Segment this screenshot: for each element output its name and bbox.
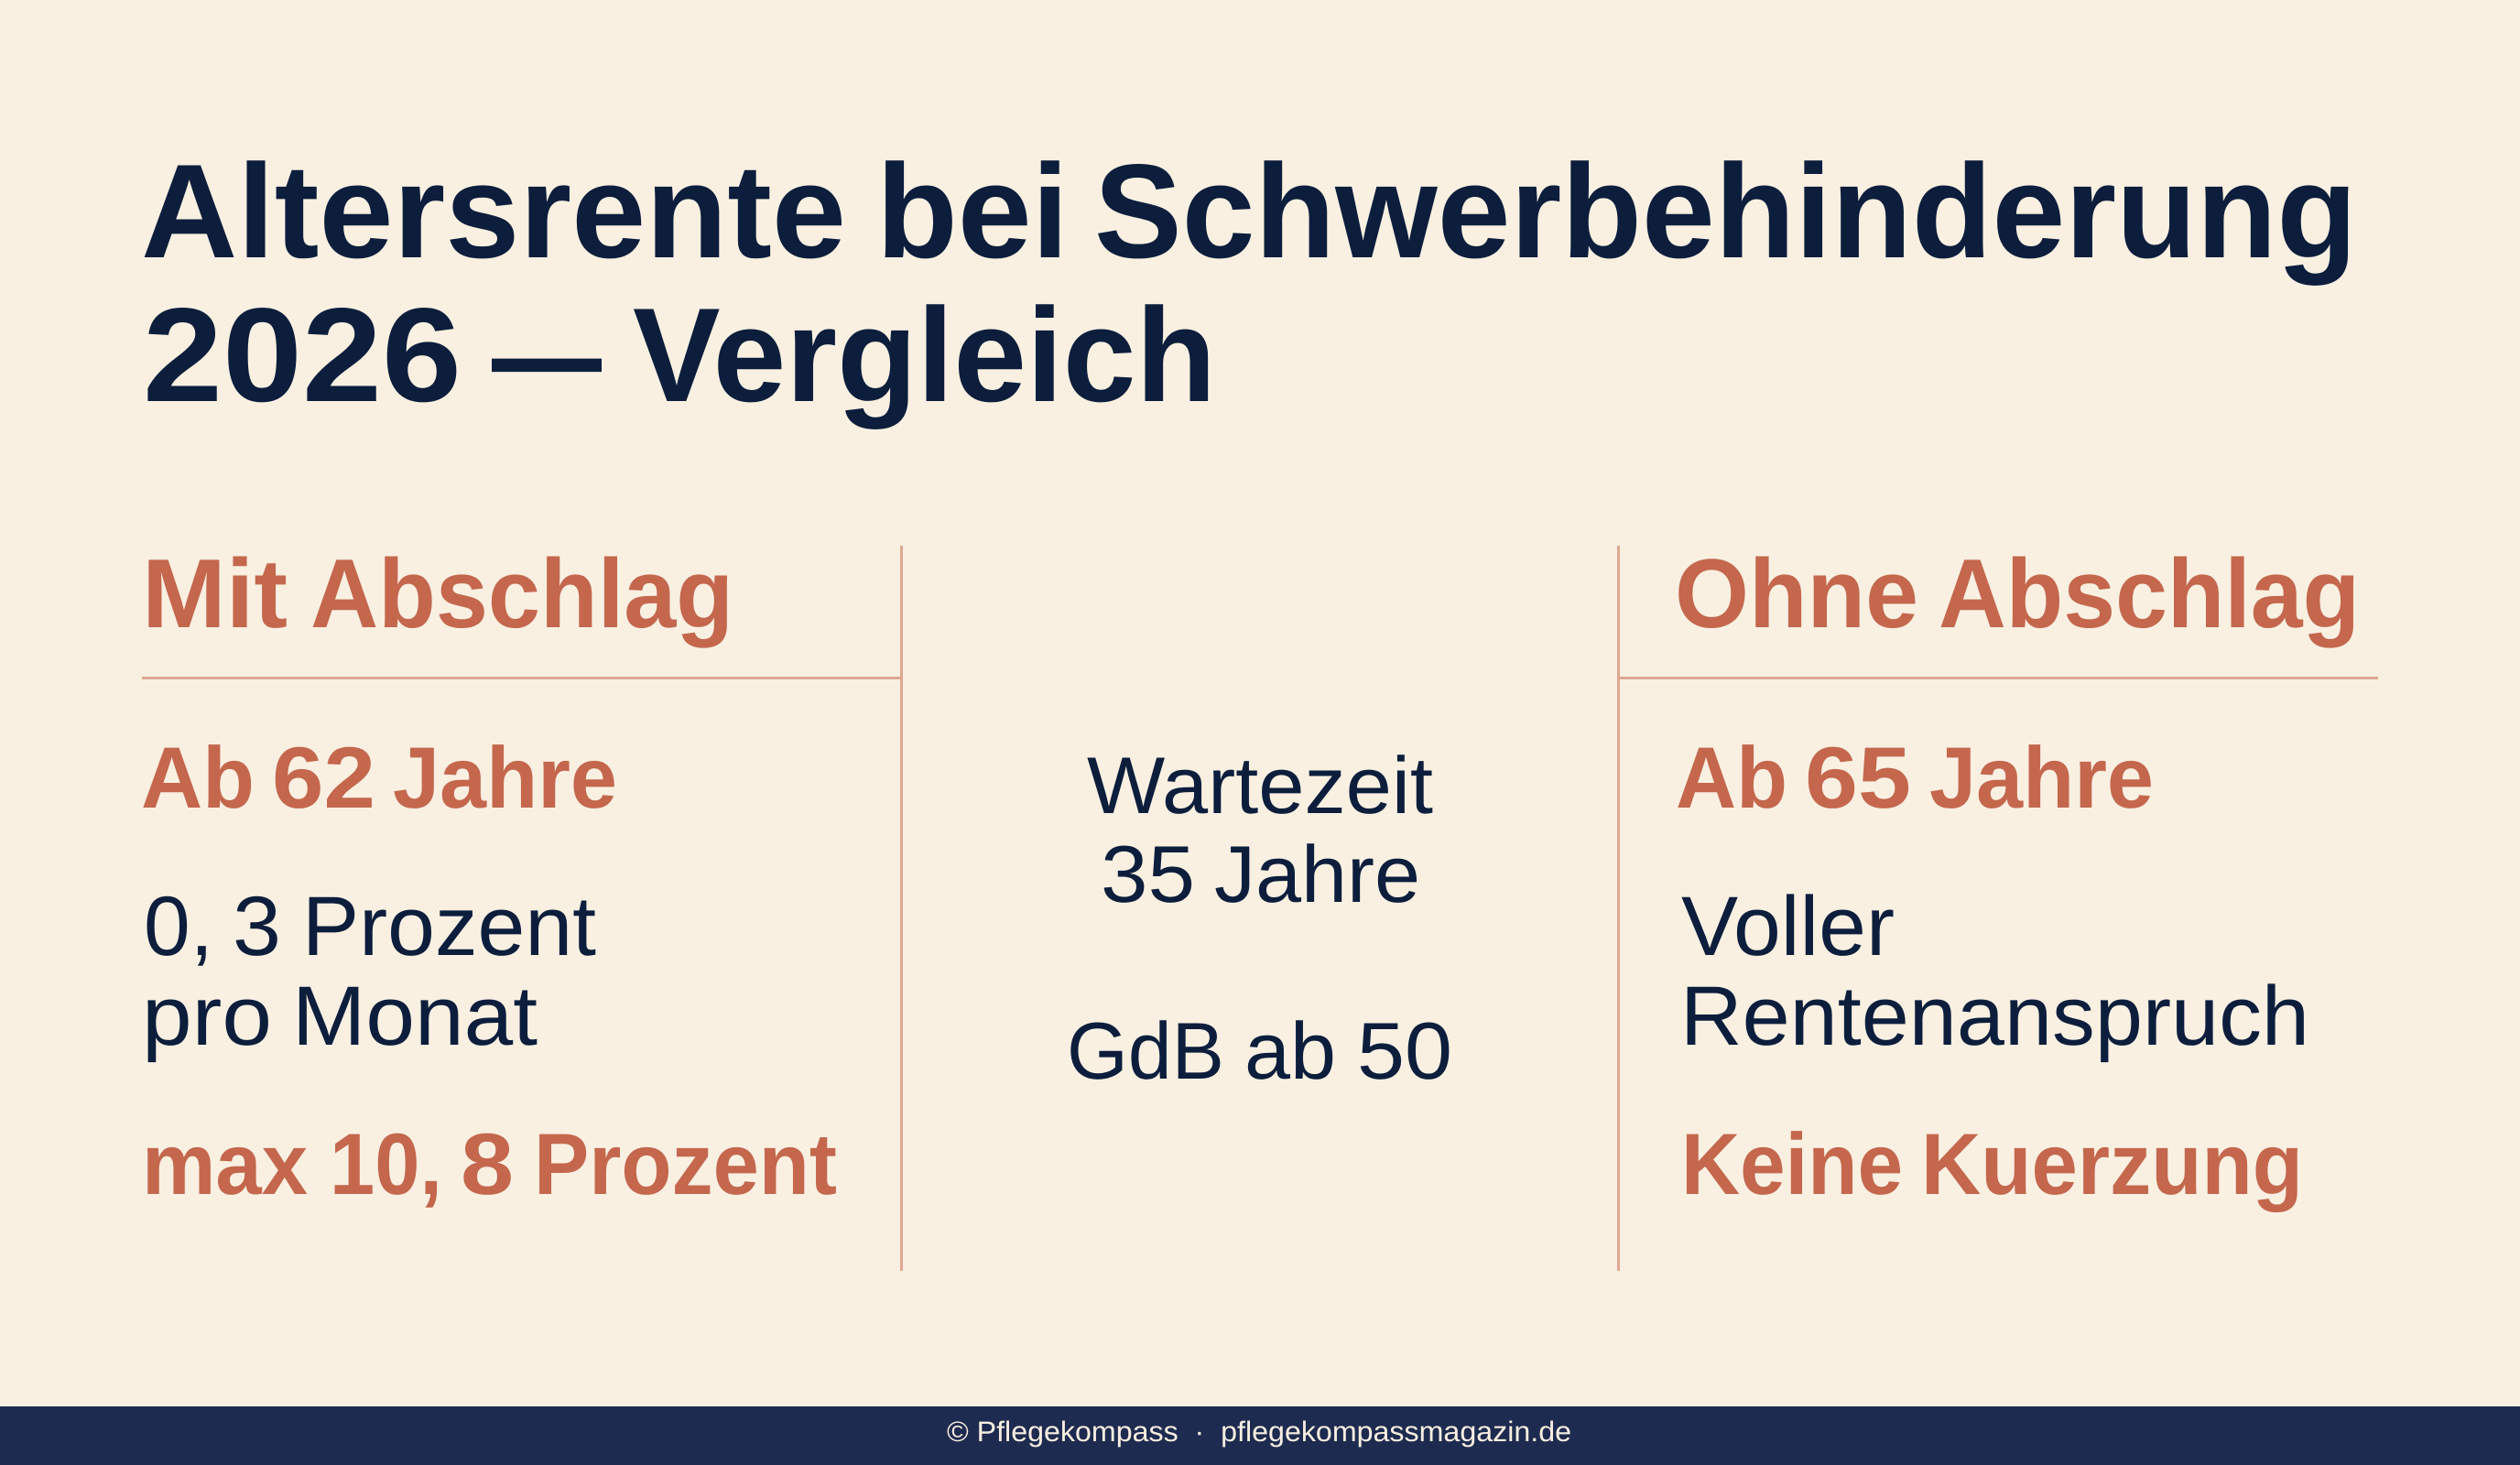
label: Ab 65 Jahre: Ab <box>1676 730 1787 827</box>
text: GdB ab 50: ab <box>1244 1005 1336 1096</box>
text: 0,3 Prozent pro Monat: pro <box>142 970 272 1063</box>
panel: gemeinsame Voraussetzungen <box>1067 740 1452 1096</box>
text: 0,3 Prozent pro Monat: 0, <box>144 880 213 973</box>
heading: Ohne Abschlag <box>1675 538 2360 648</box>
label: Keine Kuerzung: Kuerzung <box>1921 1116 2303 1213</box>
text: Wartezeit 35 Jahre: Wartezeit <box>1087 740 1433 830</box>
heading rule: right <box>1618 677 2378 679</box>
heading: Mit Abschlag: Mit <box>142 538 288 648</box>
panel: ohne Abschlag <box>1618 538 2378 1213</box>
title: Altersrente <box>141 136 846 286</box>
text: GdB ab 50: GdB <box>1067 1005 1224 1096</box>
text: GdB ab 50 <box>1067 1005 1452 1096</box>
text: Wartezeit 35 Jahre <box>1087 740 1433 919</box>
title: bei <box>876 136 1069 286</box>
title: 2026 <box>143 280 462 429</box>
footer bar <box>0 1406 2520 1465</box>
text: Voller Rentenanspruch: Rentenanspruch <box>1680 970 2309 1063</box>
text: Wartezeit 35 Jahre: 35 <box>1101 829 1195 919</box>
label: Keine Kuerzung <box>1681 1116 2303 1213</box>
divider: left vertical <box>900 546 903 1271</box>
label: Ab 62 Jahre <box>141 730 617 827</box>
label: max 10,8 Prozent: Prozent <box>534 1116 837 1213</box>
label: max 10,8 Prozent: 8 <box>461 1116 514 1213</box>
text: 0,3 Prozent pro Monat: 3 <box>233 880 281 973</box>
title: — <box>492 280 602 429</box>
heading rule: left <box>142 677 901 679</box>
label: Ab 62 Jahre: Ab <box>141 730 255 827</box>
text: 0,3 Prozent pro Monat: Prozent <box>302 880 596 973</box>
text: 0,3 Prozent pro Monat: Monat <box>292 970 538 1063</box>
divider: right vertical <box>1617 546 1620 1271</box>
text: 0,3 Prozent pro Monat <box>142 880 596 1063</box>
text: GdB ab 50: 50 <box>1357 1005 1452 1096</box>
label: Keine Kuerzung: Keine <box>1681 1116 1903 1213</box>
text: Wartezeit 35 Jahre: Jahre <box>1214 829 1420 919</box>
panel: mit Abschlag <box>141 538 901 1213</box>
title: Schwerbehinderung <box>1094 136 2357 286</box>
label: max 10,8 Prozent <box>142 1116 837 1213</box>
footer text: © Pflegekompass · pflegekompassmagazin.de <box>947 1416 1571 1448</box>
text: Voller Rentenanspruch: Voller <box>1681 880 1895 973</box>
text: Voller Rentenanspruch <box>1680 880 2309 1063</box>
label: Ab 62 Jahre: 62 <box>272 730 375 827</box>
label: Ab 65 Jahre: 65 <box>1805 730 1911 827</box>
heading: Mit Abschlag <box>142 538 733 648</box>
heading: Ohne Abschlag: Abschlag <box>1939 538 2360 648</box>
heading: Ohne Abschlag: Ohne <box>1675 538 1918 648</box>
label: max 10,8 Prozent: 10, <box>330 1116 442 1213</box>
title: Vergleich <box>633 280 1216 429</box>
heading: Mit Abschlag: Abschlag <box>310 538 733 648</box>
label: Ab 65 Jahre <box>1676 730 2154 827</box>
label: max 10,8 Prozent: max <box>142 1116 308 1213</box>
label: Ab 62 Jahre: Jahre <box>393 730 617 827</box>
label: Ab 65 Jahre: Jahre <box>1929 730 2154 827</box>
title <box>141 136 2357 429</box>
